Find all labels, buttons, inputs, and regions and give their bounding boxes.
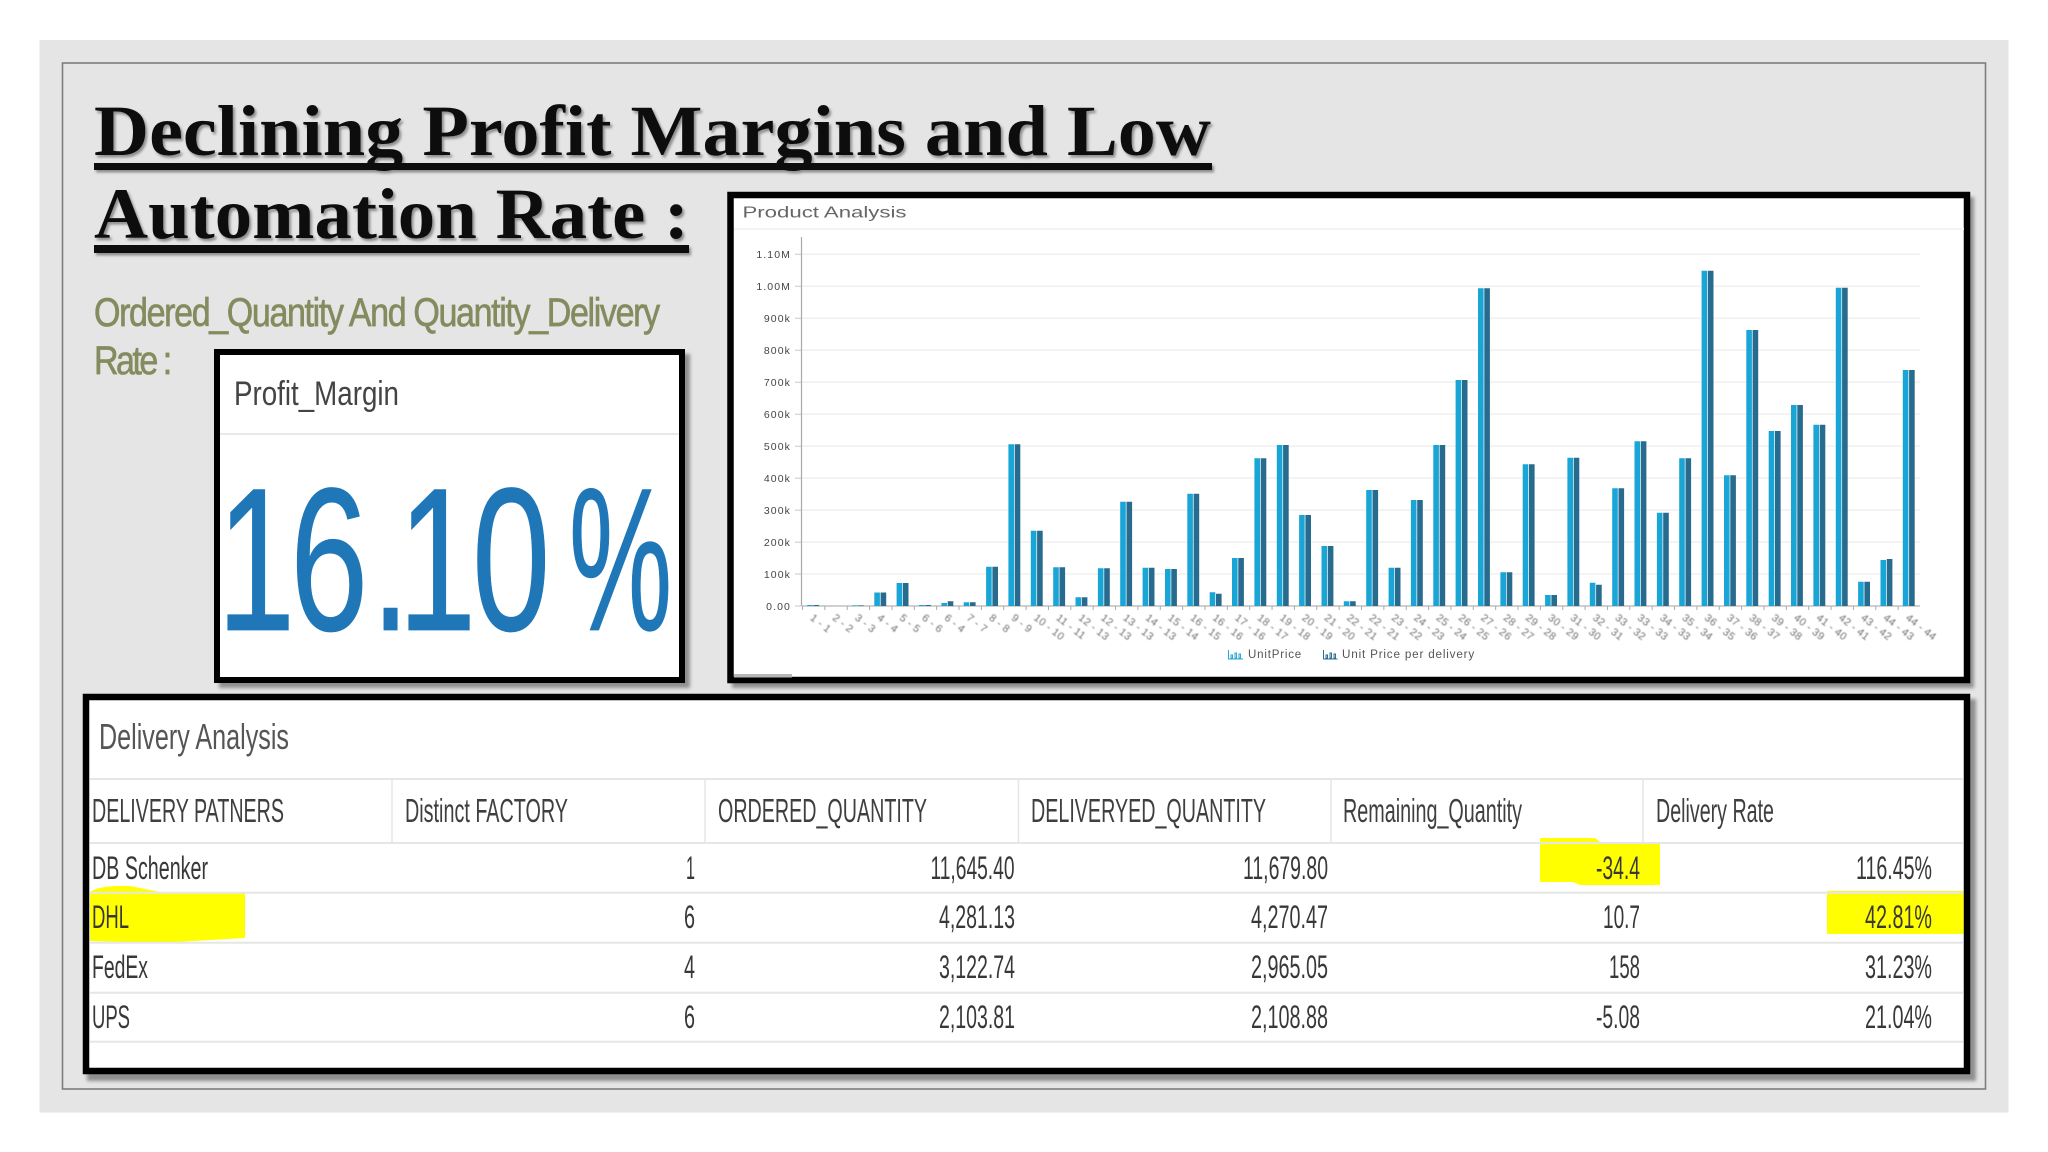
x axis labels: 9 - 9 xyxy=(1009,612,1034,636)
x axis labels: 36 - 35 xyxy=(1702,612,1737,643)
row: DB Schenker: DB Schenker xyxy=(92,850,208,886)
table header row: DELIVERY PATNERS xyxy=(92,792,284,829)
x axis labels: 39 - 38 xyxy=(1769,612,1805,643)
x axis labels: 19 - 18 xyxy=(1277,612,1313,643)
row: DB Schenker: 11,645.40 xyxy=(930,850,1014,886)
y axis labels xyxy=(756,249,791,613)
row: UPS: 6 xyxy=(684,999,695,1035)
profit margin value: % xyxy=(569,447,672,674)
x axis labels: 22 - 21 xyxy=(1367,612,1402,643)
row: FedEx: 3,122.74 xyxy=(939,949,1015,985)
row: FedEx xyxy=(92,949,1932,985)
scrollbar thumb xyxy=(734,674,792,678)
x axis labels: 12 - 13 xyxy=(1076,612,1111,643)
x axis labels: 27 - 26 xyxy=(1478,612,1514,643)
x axis labels: 22 - 21 xyxy=(1344,612,1380,643)
row: DHL xyxy=(92,899,1932,935)
y axis labels: 700k xyxy=(764,377,791,389)
x axis labels: 23 - 22 xyxy=(1389,612,1424,643)
table grid xyxy=(90,779,1963,1042)
x axis labels: 44 - 44 xyxy=(1903,612,1939,643)
table header row: DELIVERYED_QUANTITY xyxy=(1031,792,1266,829)
title: Automation Rate : xyxy=(94,174,689,254)
x axis labels: 35 - 34 xyxy=(1680,612,1715,643)
x axis labels: 2 - 2 xyxy=(830,612,856,636)
x axis labels: 16 - 16 xyxy=(1210,612,1246,643)
y axis labels: 400k xyxy=(764,473,791,485)
subtitle: Ordered_Quantity And Quantity_Delivery xyxy=(94,289,661,335)
x axis labels: 41 - 40 xyxy=(1814,612,1849,643)
row: UPS: UPS xyxy=(92,999,130,1035)
table header row: Remaining_Quantity xyxy=(1343,792,1522,829)
x axis labels xyxy=(808,612,1939,643)
x axis labels: 37 - 36 xyxy=(1724,612,1760,643)
x axis labels: 6 - 6 xyxy=(919,612,945,636)
x axis labels: 25 - 24 xyxy=(1434,612,1469,643)
y axis labels: 800k xyxy=(764,345,791,357)
x axis labels: 15 - 14 xyxy=(1165,612,1201,643)
chart legend: UnitPrice xyxy=(1248,649,1302,661)
x axis labels: 43 - 42 xyxy=(1859,612,1894,643)
chart legend: Unit Price per delivery xyxy=(1342,649,1475,661)
x axis labels: 20 - 19 xyxy=(1300,612,1335,643)
x axis labels: 6 - 4 xyxy=(942,612,967,636)
x axis labels: 33 - 32 xyxy=(1613,612,1648,643)
row: DHL: 10.7 xyxy=(1603,899,1640,935)
x axis labels: 29 - 28 xyxy=(1523,612,1559,643)
row: DHL: DHL xyxy=(92,899,129,935)
subtitle xyxy=(94,289,661,383)
row: DB Schenker: 11,679.80 xyxy=(1243,850,1328,886)
title: Declining Profit Margins and Low xyxy=(94,91,1211,171)
subtitle: Rate : xyxy=(94,337,172,383)
x axis labels: 31 - 30 xyxy=(1568,612,1603,643)
row: DB Schenker: 116.45% xyxy=(1856,850,1932,886)
row: DHL: 42.81% xyxy=(1865,899,1932,935)
x axis labels: 16 - 15 xyxy=(1188,612,1223,643)
x axis labels: 44 - 43 xyxy=(1881,612,1916,643)
y axis labels: 500k xyxy=(764,441,791,453)
panel: product analysis chart xyxy=(730,195,1974,688)
row: DB Schenker xyxy=(92,850,1932,886)
y axis labels: 200k xyxy=(764,537,791,549)
x axis labels: 17 - 16 xyxy=(1232,612,1268,643)
panel: profit margin card xyxy=(217,352,690,688)
x axis labels: 13 - 13 xyxy=(1121,612,1156,643)
x axis labels: 4 - 4 xyxy=(875,612,900,636)
row: UPS: -5.08 xyxy=(1596,999,1640,1035)
x axis labels: 32 - 31 xyxy=(1590,612,1626,643)
x axis labels: 40 - 39 xyxy=(1791,612,1827,643)
x axis labels: 26 - 25 xyxy=(1456,612,1491,643)
row: DHL: 4,281.13 xyxy=(939,899,1015,935)
y axis labels: 1.00M xyxy=(756,281,791,293)
row: FedEx: 4 xyxy=(684,949,695,985)
row: FedEx: FedEx xyxy=(92,949,148,985)
panel: delivery analysis table xyxy=(86,697,1976,1081)
x axis labels: 33 - 33 xyxy=(1635,612,1670,643)
highlight: delivery rate xyxy=(1827,891,1964,934)
title xyxy=(94,91,1212,254)
y axis labels: 300k xyxy=(764,505,791,517)
x axis labels: 21 - 20 xyxy=(1322,612,1357,643)
row: UPS: 2,103.81 xyxy=(939,999,1015,1035)
x axis labels: 18 - 17 xyxy=(1255,612,1290,643)
x axis labels: 3 - 3 xyxy=(852,612,878,636)
x axis labels: 11 - 11 xyxy=(1054,612,1088,642)
table header row: Distinct FACTORY xyxy=(405,792,568,829)
table header row xyxy=(92,792,1774,829)
y axis labels: 100k xyxy=(764,569,791,581)
x axis labels: 12 - 13 xyxy=(1098,612,1134,643)
row: DB Schenker: 1 xyxy=(686,850,695,886)
x axis labels: 1 - 1 xyxy=(808,612,833,636)
y axis labels: 900k xyxy=(764,313,791,325)
x axis labels: 14 - 13 xyxy=(1143,612,1178,643)
x axis labels: 30 - 29 xyxy=(1546,612,1581,643)
y axis labels: 600k xyxy=(764,409,791,421)
highlight: DHL xyxy=(90,886,245,943)
row: FedEx: 2,965.05 xyxy=(1251,949,1328,985)
chart legend xyxy=(1228,649,1475,661)
series: UnitPrice xyxy=(807,271,1908,606)
bar chart xyxy=(756,237,1939,643)
series: Unit Price per delivery xyxy=(814,271,1915,606)
x axis labels: 34 - 33 xyxy=(1657,612,1693,643)
profit margin value: 16.10 xyxy=(217,446,550,674)
y axis labels: 0.00 xyxy=(766,601,791,613)
row: DB Schenker: -34.4 xyxy=(1596,850,1640,886)
highlight: remaining quantity xyxy=(1540,838,1660,885)
x axis labels: 38 - 37 xyxy=(1747,612,1782,643)
row: DHL: 4,270.47 xyxy=(1251,899,1328,935)
x axis labels: 24 - 23 xyxy=(1411,612,1447,643)
x axis labels: 28 - 27 xyxy=(1501,612,1536,643)
x axis labels: 7 - 7 xyxy=(964,612,990,636)
x axis labels: 8 - 8 xyxy=(987,612,1012,636)
row: DHL: 6 xyxy=(684,899,695,935)
table header row: ORDERED_QUANTITY xyxy=(718,792,927,829)
row: FedEx: 158 xyxy=(1609,949,1640,985)
x axis labels: 5 - 5 xyxy=(897,612,923,636)
row: UPS xyxy=(92,999,1932,1035)
x axis labels: 42 - 41 xyxy=(1836,612,1872,643)
row: UPS: 2,108.88 xyxy=(1251,999,1328,1035)
row: UPS: 21.04% xyxy=(1865,999,1932,1035)
card heading: Profit_Margin xyxy=(234,375,399,413)
row: FedEx: 31.23% xyxy=(1865,949,1932,985)
x axis labels: 10 - 10 xyxy=(1031,612,1067,643)
table heading: Delivery Analysis xyxy=(99,716,289,757)
table header row: Delivery Rate xyxy=(1656,792,1774,829)
chart heading: Product Analysis xyxy=(742,204,906,222)
y axis labels: 1.10M xyxy=(756,249,791,261)
